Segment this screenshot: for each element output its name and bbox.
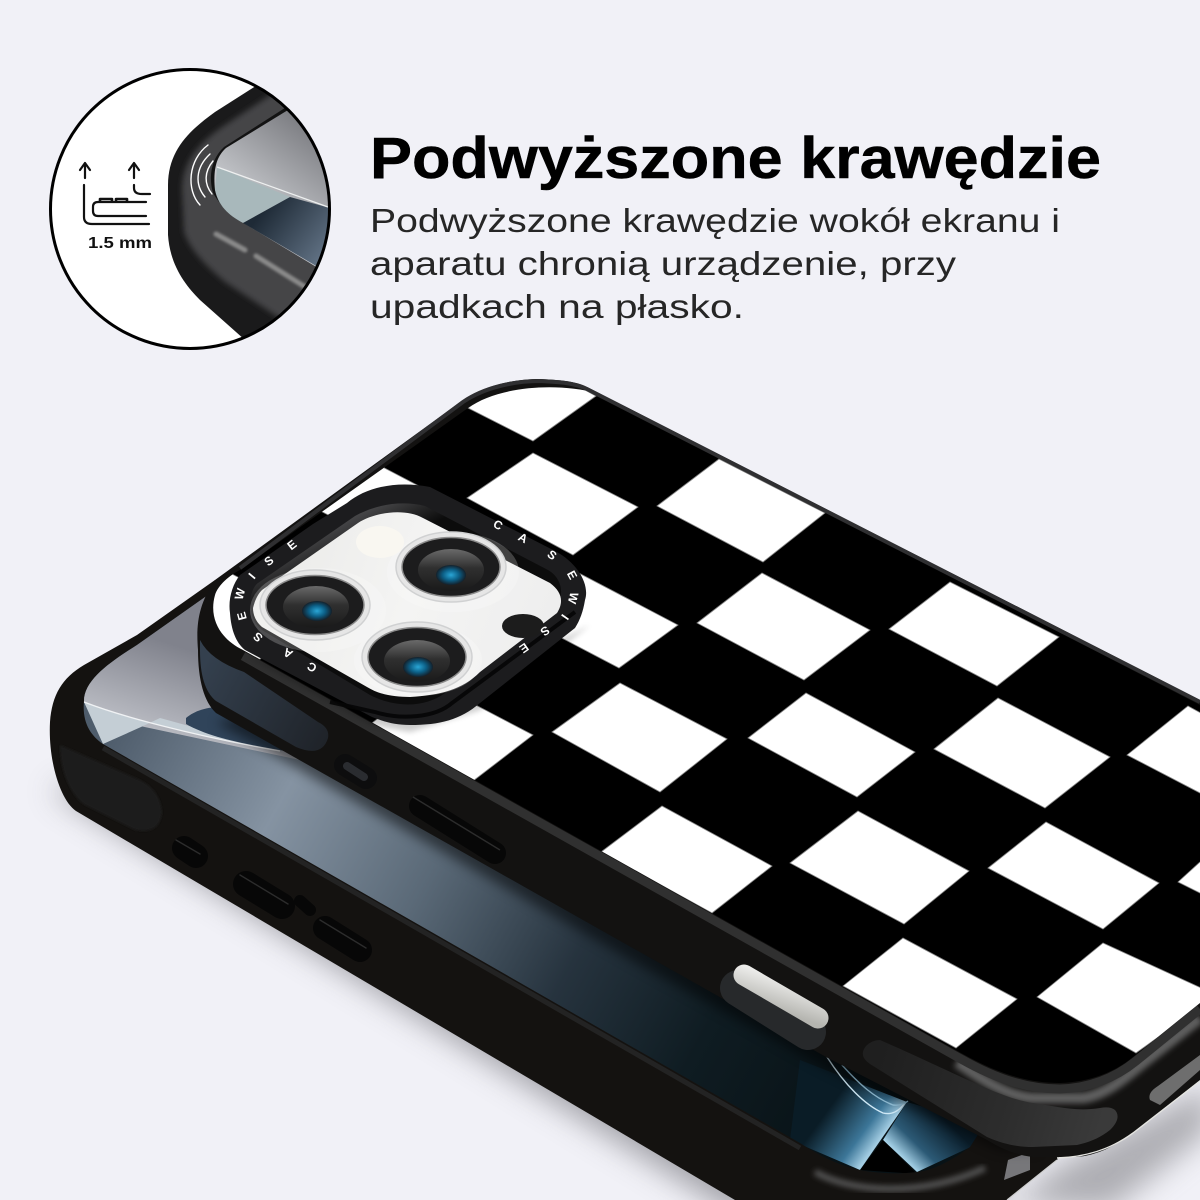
camera glass window	[253, 512, 561, 697]
rear phone screen	[84, 596, 978, 1174]
charging port housing	[738, 988, 808, 1032]
description: Podwyższone krawędzie wokół ekranu i	[370, 203, 1060, 240]
front phone ports	[345, 765, 818, 1032]
small port	[345, 765, 366, 778]
ring lettering: A	[516, 530, 530, 546]
lens bumps	[250, 532, 519, 696]
drop shadow bottom right	[1010, 1085, 1200, 1200]
lens 3	[362, 622, 472, 692]
ring lettering: I	[558, 612, 572, 622]
ring lettering: E	[564, 568, 580, 582]
camera ring bevel line	[330, 612, 575, 717]
ring lettering: W	[232, 586, 248, 601]
icon: white arcs on the bumper	[191, 145, 213, 205]
text panel: heading and description	[370, 126, 1101, 326]
microphone hole	[502, 614, 544, 638]
inset border	[50, 70, 330, 348]
front phone edge highlight	[1057, 1081, 1200, 1158]
camera drop shadow	[245, 625, 590, 732]
ring lettering: E	[234, 610, 250, 622]
description: aparatu chronią urządzenie, przy	[370, 246, 956, 283]
rear phone bottom highlight	[815, 1168, 985, 1189]
front phone corner patch	[200, 640, 328, 751]
white squares	[151, 360, 1200, 1053]
rear phone buttons	[176, 840, 366, 950]
rear phone corner patch	[60, 745, 162, 831]
lens 1	[260, 570, 370, 640]
ring lettering: C	[491, 517, 505, 533]
rear phone inner bevel	[103, 748, 800, 1148]
icon label: 1.5 mm	[88, 235, 152, 252]
camera module	[229, 484, 590, 732]
camera ring inner wall	[250, 503, 561, 705]
heading: Podwyższone krawędzie	[370, 126, 1101, 191]
ring lettering: S	[250, 629, 266, 645]
ring lettering: A	[280, 645, 295, 661]
ring lettering: C	[304, 659, 319, 675]
volume button	[420, 806, 495, 853]
ring lettering: S	[545, 547, 559, 563]
ring lettering: E	[517, 640, 531, 656]
front phone bottom-right highlight band	[957, 1018, 1200, 1098]
checkered phone back	[213, 387, 1200, 1083]
front phone shadow	[216, 700, 1040, 1150]
circular inset: raised edge close-up	[50, 69, 345, 349]
camera flash	[356, 526, 404, 558]
lens 2	[396, 532, 506, 602]
ring lettering	[232, 517, 581, 675]
description: upadkach na płasko.	[370, 289, 744, 326]
ring lettering: S	[538, 623, 552, 639]
rear phone bumper	[50, 580, 1100, 1200]
camera ring outer	[229, 484, 586, 725]
front phone bottom-right patch	[863, 1040, 1118, 1147]
charging port silver	[744, 975, 818, 1018]
small port slot	[347, 766, 364, 777]
ring lettering: W	[565, 591, 581, 606]
icon: 1.5 mm raised edge diagram	[80, 163, 150, 224]
ring lettering: S	[262, 553, 276, 569]
front phone top rim	[240, 381, 1200, 702]
phone illustration	[50, 360, 1200, 1200]
drop shadow under rear phone	[50, 780, 1000, 1200]
front phone speaker detail	[1149, 1055, 1200, 1105]
inset phone corner	[168, 87, 328, 337]
rear phone side edge line	[1007, 1160, 1057, 1200]
front phone screen bevel	[243, 656, 1200, 1089]
rear phone metal port	[1004, 1152, 1030, 1180]
ring lettering: I	[246, 570, 258, 582]
volume button highlight	[413, 797, 500, 850]
description	[370, 203, 1060, 326]
front phone frame	[197, 379, 1200, 1157]
ring lettering: E	[285, 537, 299, 553]
